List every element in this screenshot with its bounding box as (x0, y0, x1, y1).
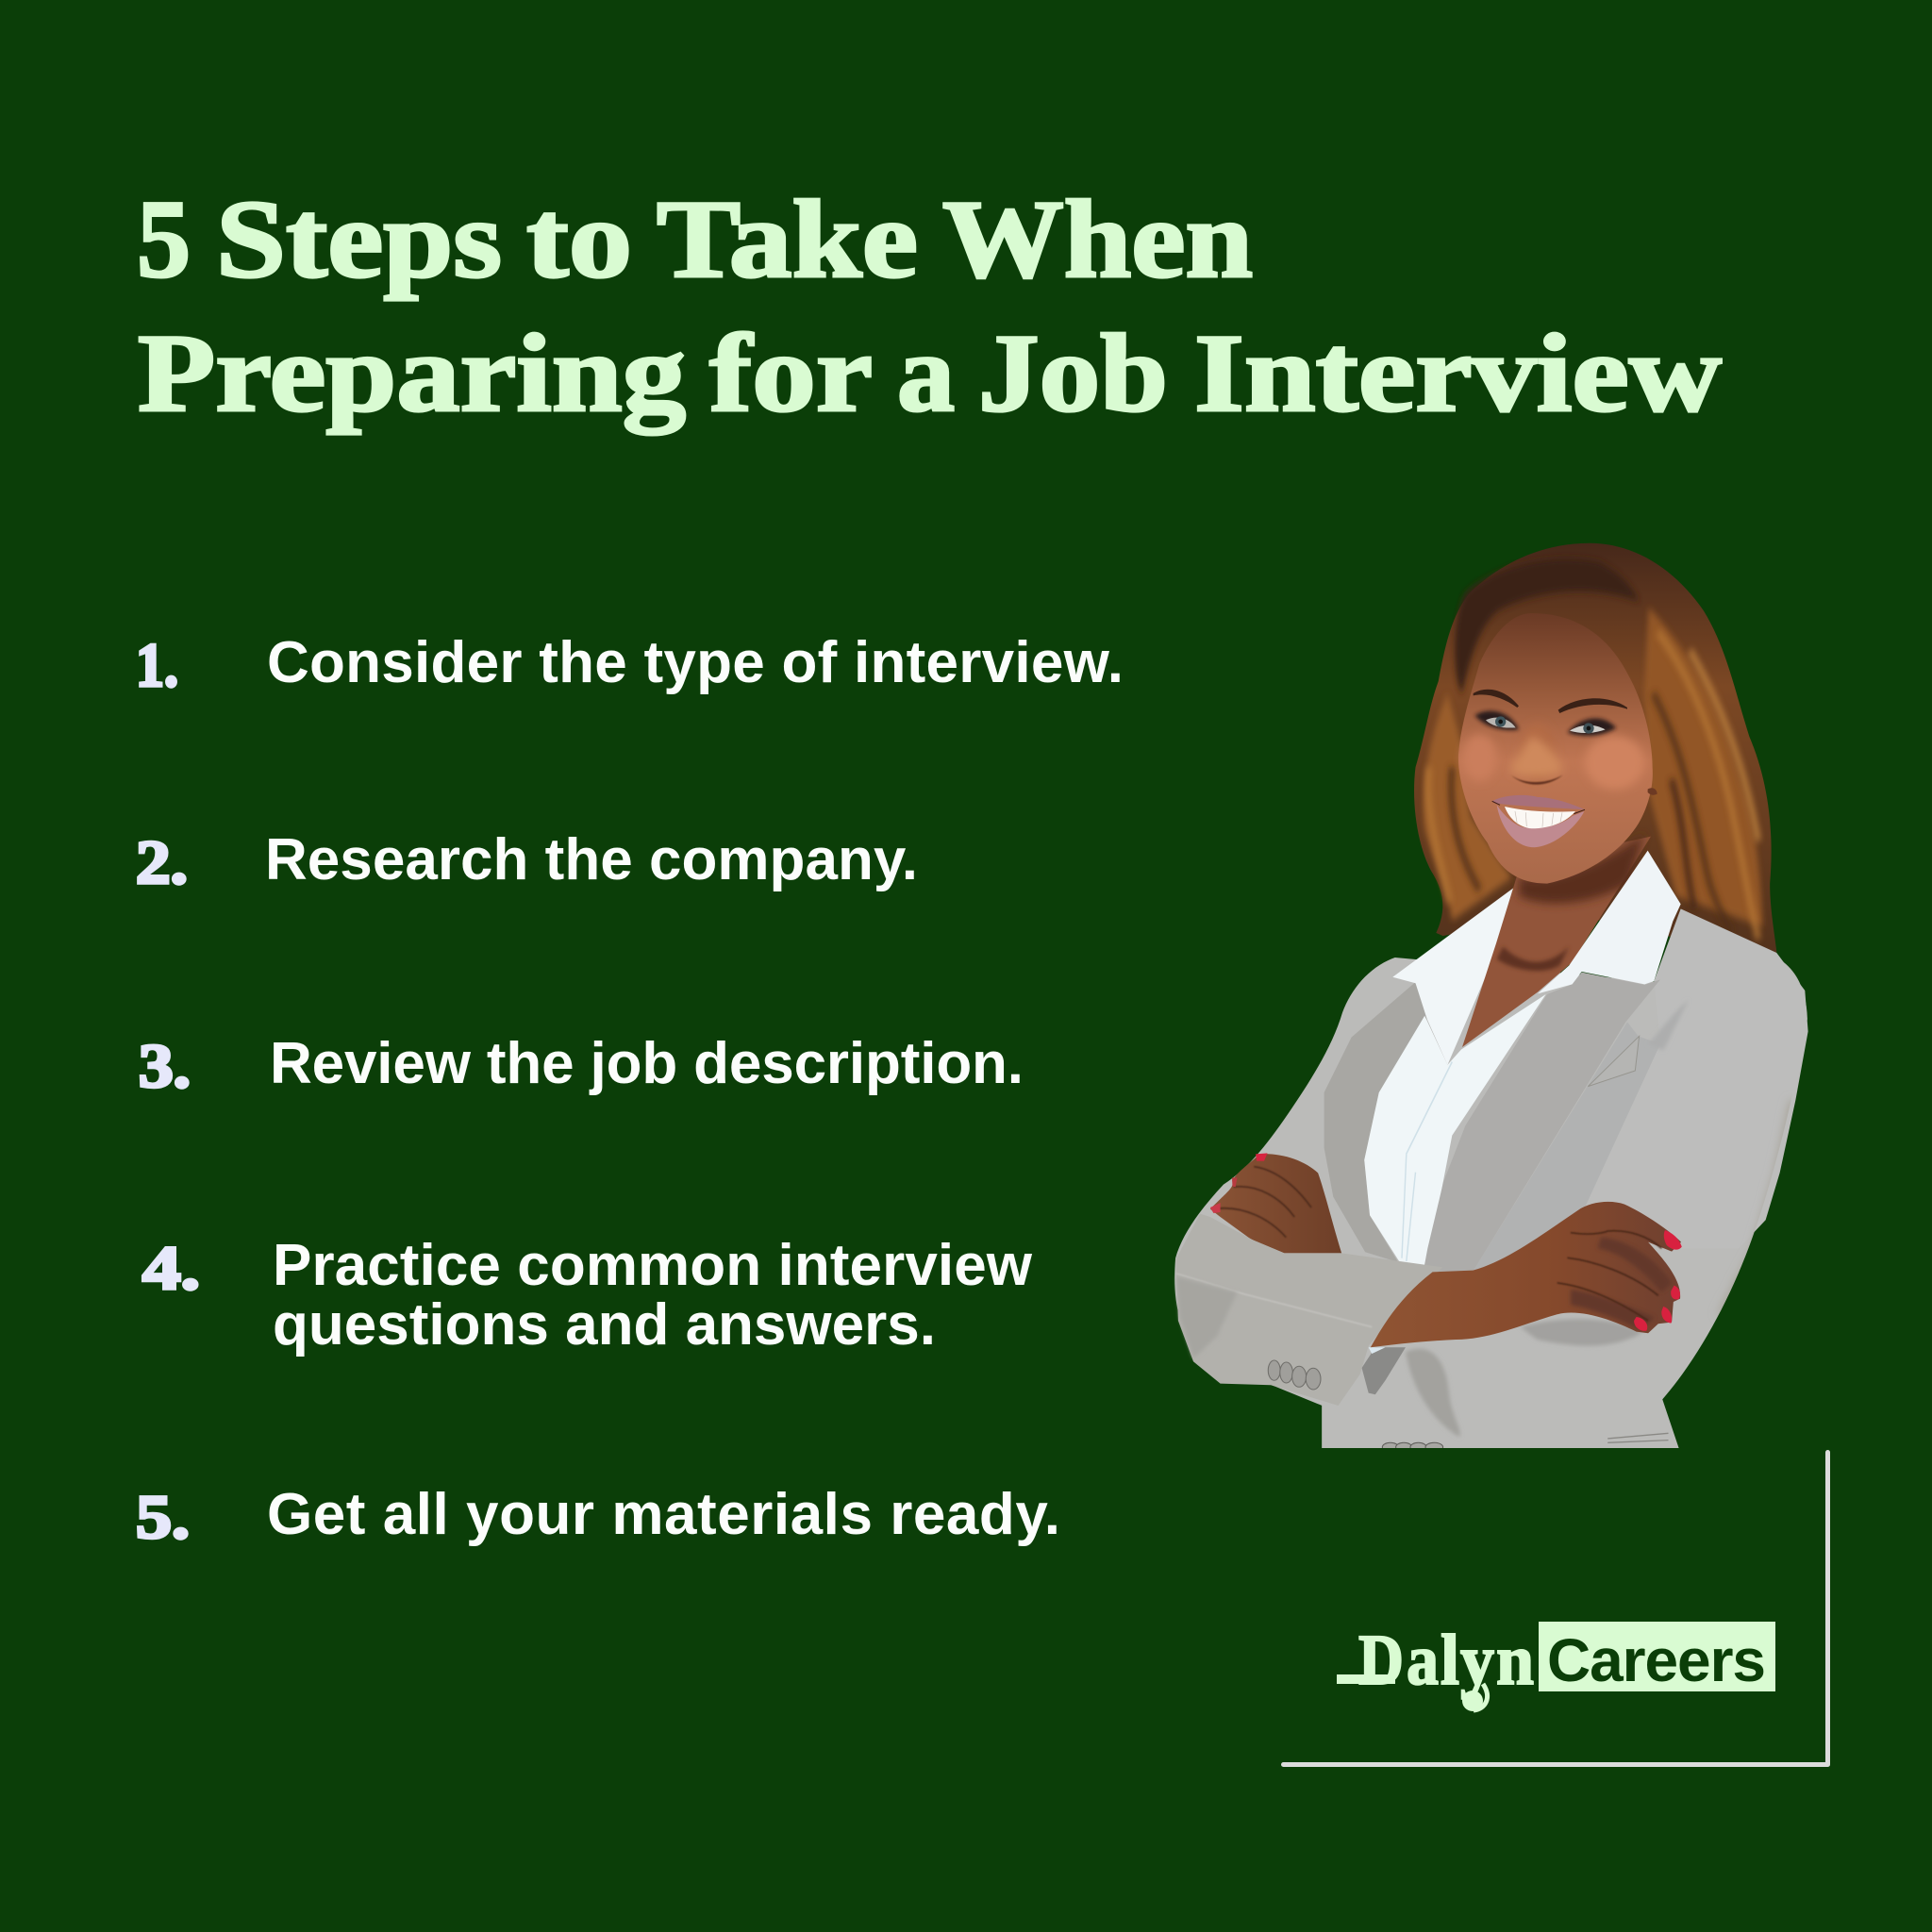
right collar (1538, 851, 1681, 993)
sleeve tone (1654, 908, 1808, 1232)
neck, right collar, lapel and chest (1423, 833, 1808, 1274)
step 5: Get all your materials ready. (267, 1482, 1060, 1547)
title: for (709, 311, 873, 435)
shirt cuff and lining (1362, 1347, 1406, 1394)
step 4: 4. (142, 1234, 200, 1303)
title: 5 (137, 177, 191, 301)
logo word: Dalyn (1337, 1621, 1534, 1711)
step 1: 1. (136, 631, 178, 700)
chest panel (1472, 1022, 1660, 1274)
arms and hands (1175, 1153, 1682, 1452)
step 4: questions and answers. (273, 1292, 936, 1357)
lapel (1423, 973, 1660, 1274)
corner frame lines (1281, 1450, 1830, 1767)
logo word: Dalyn: l (1441, 1621, 1459, 1700)
step 1: Consider the type of interview. (267, 630, 1124, 695)
pocket (1588, 1036, 1640, 1087)
hair strands (1428, 632, 1758, 939)
title: a (897, 311, 955, 435)
photo: smiling businesswoman with crossed arms (1174, 543, 1818, 1452)
left chest panel (1324, 982, 1427, 1271)
logo: Dalyn Careers (1337, 1621, 1775, 1711)
hair and jacket silhouette (1174, 543, 1807, 1450)
step 2: Research the company. (265, 827, 918, 892)
step 4 (142, 1233, 1033, 1357)
eyes (1474, 711, 1519, 730)
logo word: Dalyn: n (1496, 1621, 1534, 1700)
shirt lower front (1364, 994, 1546, 1266)
steps list (136, 630, 1124, 1552)
title: to (526, 177, 632, 301)
neck (1462, 837, 1651, 1047)
ear (1648, 788, 1657, 795)
step 4: Practice common interview (273, 1233, 1033, 1298)
title: Steps (216, 177, 502, 301)
viewer-left hand (1210, 1154, 1341, 1253)
sleeve buttons (1268, 1360, 1321, 1390)
logo word: Dalyn: y (1460, 1621, 1494, 1700)
viewer-right forearm and hand (1371, 1202, 1681, 1347)
title (137, 177, 1722, 435)
nose (1509, 736, 1563, 777)
mouth (1492, 795, 1585, 847)
right nails (1664, 1230, 1682, 1250)
step 5: 5. (136, 1483, 190, 1552)
title: Take (657, 177, 918, 301)
face (1458, 613, 1657, 884)
jacket outline (1174, 914, 1807, 1450)
left nails (1256, 1153, 1268, 1161)
left collar wing (1392, 882, 1522, 1065)
title: Preparing (138, 311, 686, 435)
logo word: Dalyn: a (1407, 1621, 1439, 1700)
jacket front buttons (1382, 1442, 1443, 1452)
step 3: Review the job description. (270, 1031, 1024, 1096)
title: When (942, 177, 1253, 301)
title: Job (978, 311, 1168, 435)
shading under forearm (1520, 1319, 1641, 1346)
sleeve edge shading clipped to the jacket (1717, 1101, 1818, 1314)
logo word: Careers on light box: Careers (1547, 1626, 1766, 1694)
step 2: 2. (136, 828, 188, 897)
logo word: Dalyn: D (1358, 1621, 1404, 1700)
eyebrows (1474, 690, 1519, 708)
title: Interview (1194, 311, 1722, 435)
under chin shadow (1519, 833, 1644, 904)
viewer-left cuff sleeve (1175, 1214, 1442, 1406)
step 3: 3. (139, 1032, 191, 1101)
